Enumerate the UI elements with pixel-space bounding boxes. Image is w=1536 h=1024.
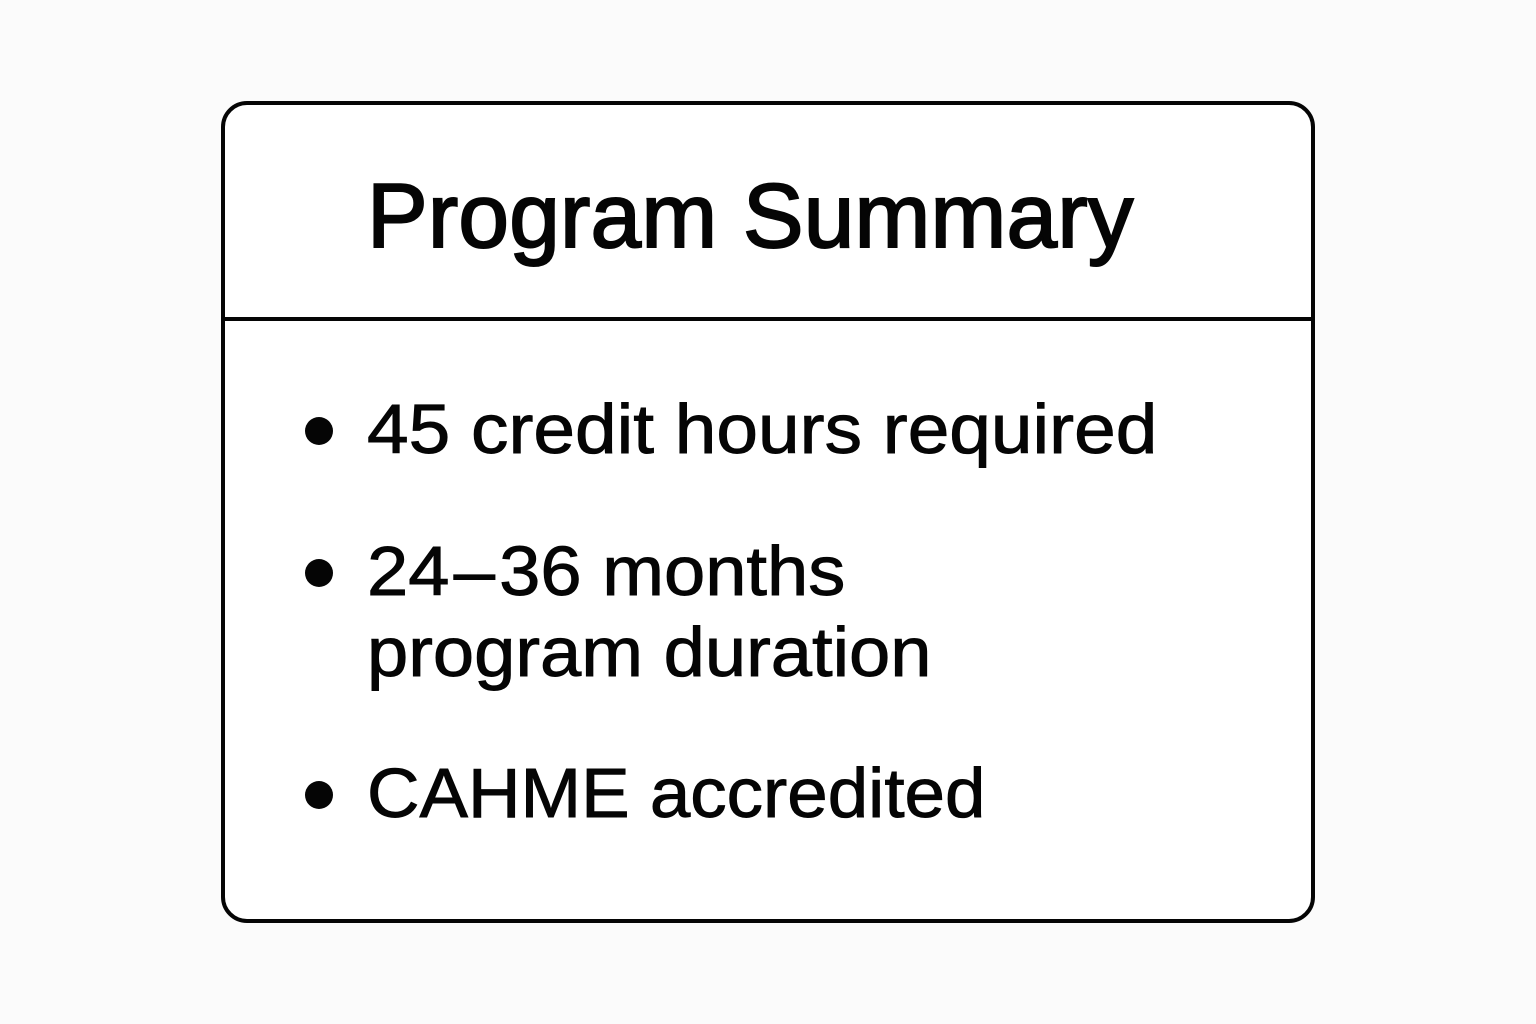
text: duration: program duration <box>367 613 932 691</box>
bullet icon: duration <box>305 559 333 587</box>
text: duration <box>367 532 932 691</box>
text: duration: 24–36 months <box>367 532 845 610</box>
panel: program summary card <box>221 101 1315 923</box>
bullet icon: accreditation <box>305 781 333 809</box>
bullet icon: credit hours <box>305 417 333 445</box>
title: Program Summary <box>367 166 1134 267</box>
text: accreditation: CAHME accredited <box>367 754 985 832</box>
text: credit hours: 45 credit hours required <box>367 390 1157 468</box>
